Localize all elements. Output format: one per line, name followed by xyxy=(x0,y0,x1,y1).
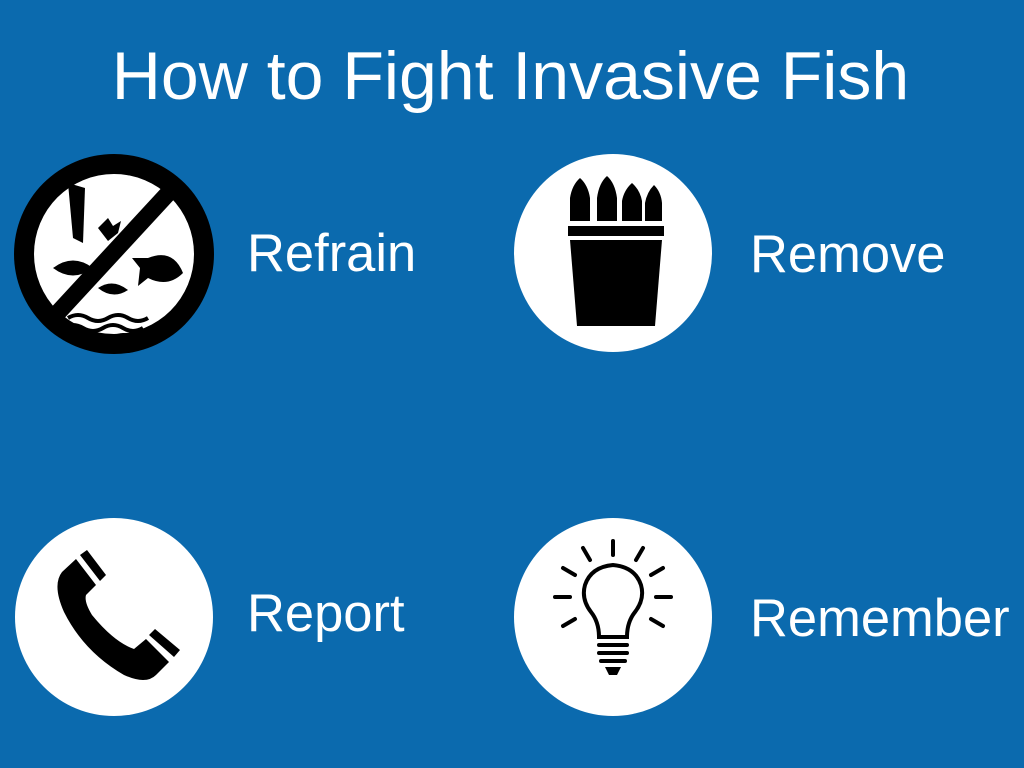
title: How to Fight Invasive Fish xyxy=(112,38,909,114)
label: Remove: Remove xyxy=(750,225,946,284)
label: Remember: Remember xyxy=(750,589,1010,648)
icon: remove (bucket of fish) xyxy=(514,154,712,352)
label: Report: Report xyxy=(247,584,405,643)
icon: remember (light bulb) xyxy=(514,518,712,716)
icon: report (phone) xyxy=(15,518,213,716)
label: Refrain: Refrain xyxy=(247,224,416,283)
icon: refrain (no dumping fish) xyxy=(14,154,214,354)
